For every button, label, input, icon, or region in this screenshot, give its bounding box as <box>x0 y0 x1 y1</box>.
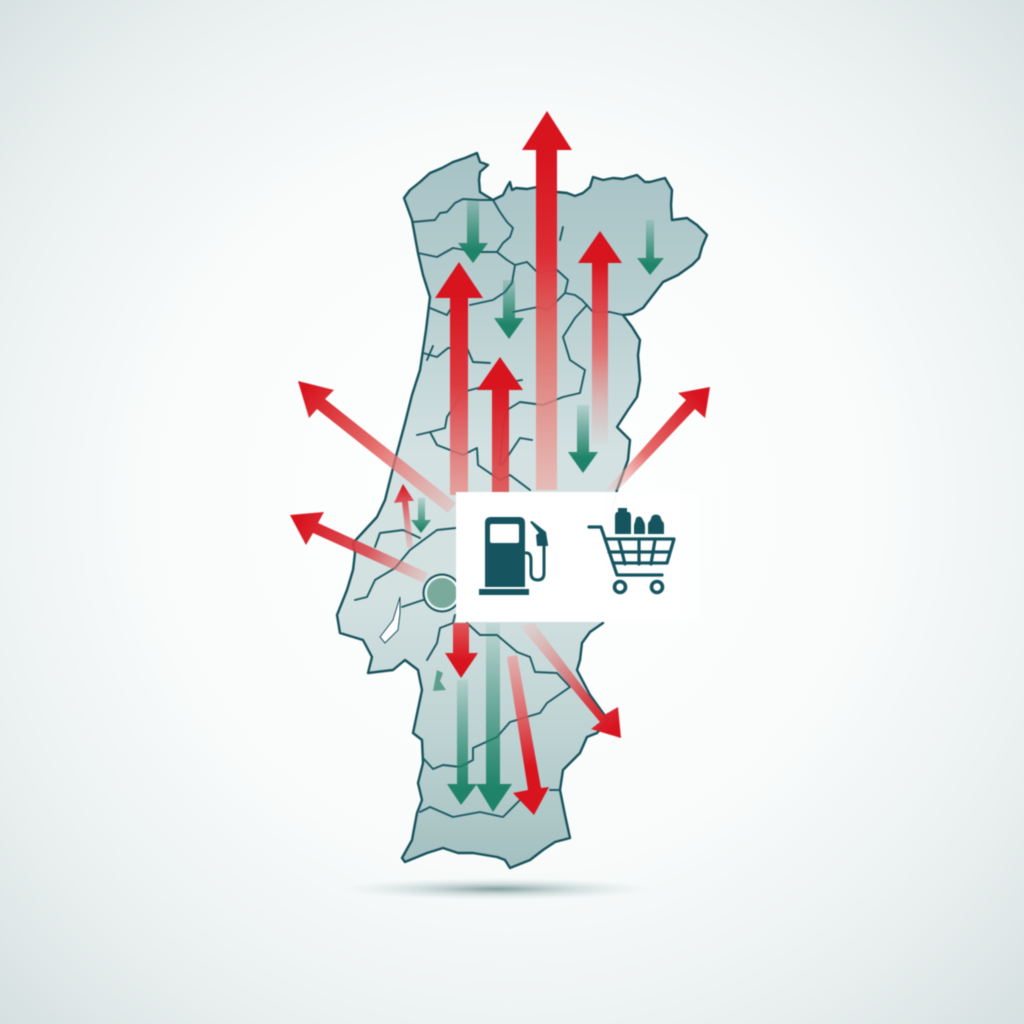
icon: shopping cart <box>589 508 674 592</box>
diagonal red arrows <box>290 381 710 583</box>
arrow: west <box>290 512 428 583</box>
arrow: tallest red <box>522 111 572 490</box>
arrow: right red <box>578 231 622 445</box>
white panel right fade <box>604 492 720 622</box>
green arrows in the north <box>411 200 664 533</box>
cart frame <box>589 527 674 575</box>
arrow: north-west <box>298 381 456 513</box>
red arrows pointing up <box>435 111 622 495</box>
arrow: green north-east <box>637 220 664 275</box>
arrow: green north-west <box>458 200 488 263</box>
arrow: left red <box>435 262 483 495</box>
region borders <box>355 199 623 817</box>
arrow: small red <box>394 484 414 548</box>
white panel <box>456 492 606 622</box>
arrow: green center-east <box>568 405 598 473</box>
arrow: green north-center <box>494 280 524 339</box>
arrow: red diagonal down <box>507 655 549 815</box>
pump body <box>485 517 525 587</box>
cart wheels <box>614 582 626 592</box>
arrow: green long right <box>476 623 512 812</box>
pump base <box>479 589 529 595</box>
estuary <box>380 597 400 643</box>
infographic content <box>290 111 720 900</box>
map of Portugal <box>337 153 707 868</box>
pump nozzle <box>530 521 548 546</box>
small green marker <box>433 670 446 691</box>
location marker <box>422 574 462 612</box>
pump hose <box>525 545 544 580</box>
ground shadow <box>342 878 652 900</box>
arrow: red south-east <box>520 623 621 738</box>
groceries <box>615 508 664 534</box>
arrow: north-east <box>606 387 710 490</box>
arrow: small green <box>411 498 431 533</box>
icon: fuel pump <box>479 517 548 595</box>
arrow: red short down <box>445 623 478 678</box>
southern arrows <box>445 623 621 815</box>
arrow: green long left <box>447 680 477 805</box>
arrow: center red <box>477 357 523 495</box>
map outline <box>337 153 707 868</box>
